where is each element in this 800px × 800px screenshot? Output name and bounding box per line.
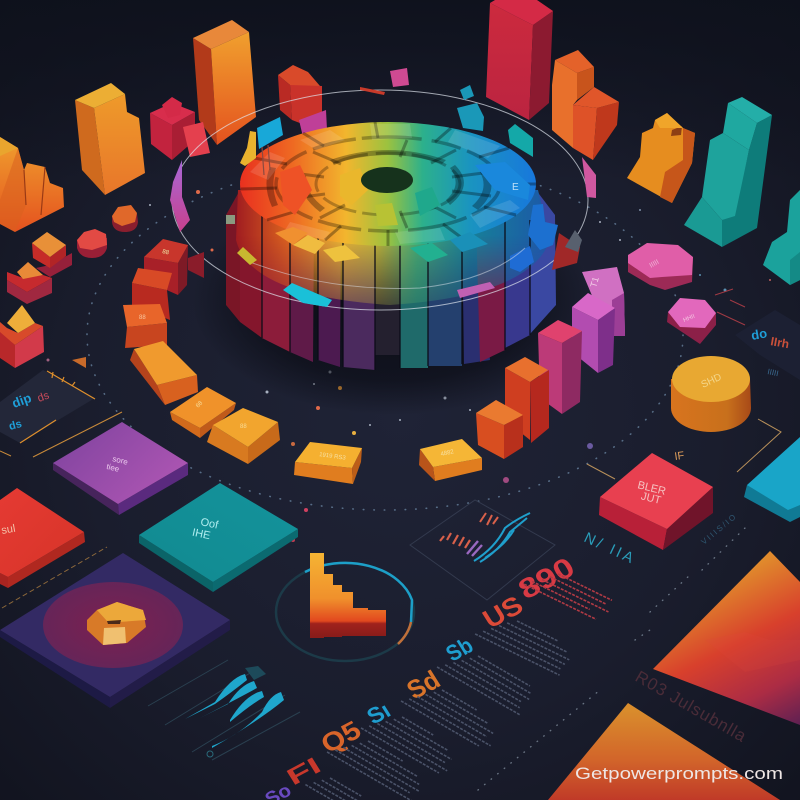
pink hexagon token: HHII [683, 314, 696, 324]
callout line right [587, 419, 781, 479]
yellow ring piece [294, 442, 362, 484]
cyan rotated label: N/ IIA [581, 529, 639, 568]
paragraph seven [305, 769, 378, 800]
right legend panel [735, 310, 800, 380]
magenta disc [43, 582, 183, 668]
ring top segments [241, 122, 536, 246]
small bar and wave chart panel [410, 500, 555, 600]
right legend panel: IIrh [769, 334, 790, 351]
small legend panel left [0, 370, 95, 443]
small red stacked cube [32, 232, 72, 277]
orange gradient panel [548, 703, 780, 800]
ring right blue stack [510, 204, 558, 272]
heading glyph four: Sd [401, 664, 445, 705]
tall orange block [193, 20, 256, 145]
amber ring piece [170, 387, 236, 438]
ring centre hole [361, 167, 413, 193]
ring front wall colours [236, 190, 550, 305]
dotted orbit around the central ring [87, 160, 683, 510]
orange triangle marker [72, 357, 86, 368]
orange cube [476, 400, 523, 459]
pink blob token: IIIII [648, 259, 660, 270]
accent line left [0, 412, 122, 457]
magenta small block [299, 110, 327, 137]
small legend panel left: ds [8, 418, 23, 433]
cyan flat block right [744, 437, 800, 522]
chart bars [310, 553, 386, 638]
watermark: Getpowerprompts.com [575, 764, 783, 783]
orbit line around ring [172, 90, 588, 310]
golden cylinder [671, 356, 751, 432]
amber ring piece two: 88 [240, 424, 247, 430]
navy flat card with disc [0, 553, 230, 708]
far left orange block group [0, 137, 64, 232]
small red stacked base [7, 262, 52, 304]
heading glyph two: US [477, 590, 528, 634]
paragraph two [475, 607, 575, 676]
amber ring piece two [207, 408, 280, 464]
ring top surface [240, 122, 536, 246]
red box ring piece [144, 239, 204, 295]
pink flat block [582, 267, 625, 336]
circular bar chart [276, 553, 414, 661]
red card text: sul [0, 523, 16, 537]
orange stepped block [552, 50, 619, 160]
paragraph five [361, 702, 459, 776]
paragraph one [524, 563, 614, 623]
dim label on right: VIIIS/IO [700, 511, 739, 547]
red block text: BLER [636, 479, 667, 498]
shadow beneath the central ring [192, 185, 592, 415]
small legend panel left: ds [36, 389, 51, 405]
paragraph three [437, 641, 535, 715]
tall amber block [75, 83, 145, 195]
yellow ring piece two [419, 439, 482, 481]
accent line mid [2, 547, 107, 608]
violet column [572, 293, 615, 373]
orbit chips [170, 68, 596, 307]
chart circle [276, 563, 414, 661]
tall crimson block [486, 0, 553, 120]
pink blob token [628, 243, 693, 290]
red flat card [0, 488, 85, 588]
teal block at right edge [763, 190, 800, 285]
yellow ring piece: 1919 RS3 [319, 452, 347, 462]
paragraph six [327, 726, 429, 800]
teal flat card [139, 483, 298, 592]
ring raised blocks: E [512, 182, 519, 193]
red box ring piece: 88 [162, 249, 170, 256]
red gradient panel [653, 551, 800, 725]
tall teal stepped block [684, 97, 772, 247]
small orange dome [112, 205, 138, 232]
red flat block right [599, 453, 713, 550]
paragraph four [401, 675, 503, 751]
yellow ring piece two: 4882 [440, 449, 455, 458]
long orange ring piece [130, 341, 198, 405]
purple card text: tiee [105, 462, 121, 474]
magenta column [538, 320, 582, 414]
scattered particles [46, 190, 771, 542]
golden cylinder: SHD [700, 372, 723, 391]
amber ring piece: 68 [195, 400, 205, 409]
teal card text: Oof [199, 516, 220, 532]
ring raised blocks [275, 162, 530, 262]
teal card text: IHE [191, 527, 211, 542]
amber stacked block [627, 113, 695, 203]
red stepped block [278, 65, 322, 125]
dim diagonal label: R03 Julsubnlla [632, 667, 750, 746]
pink hexagon token [667, 298, 716, 344]
purple flat card [53, 422, 188, 515]
pink flat block: T1 [588, 276, 601, 289]
heading glyph three: Sb [441, 632, 477, 666]
red-orange box ring piece [132, 268, 172, 320]
right legend panel: IIIII [767, 367, 779, 378]
pink callout lines [715, 289, 745, 325]
orange polygon gem [87, 602, 146, 645]
ring block highlights and shadows [250, 124, 520, 244]
tall red-orange column [505, 357, 549, 443]
central rainbow ring [226, 122, 558, 370]
heading glyph six: Q5 [315, 715, 366, 759]
heading glyph five: Sı [362, 697, 395, 729]
heading glyph seven: FI [282, 753, 326, 791]
heading glyph one: 890 [513, 552, 581, 606]
cyan flame chart [148, 660, 300, 760]
ring wall seams [262, 200, 530, 370]
ring base bars [226, 190, 556, 370]
legend glyphs: dip [10, 390, 33, 411]
right legend panel: do [750, 325, 768, 343]
purple card text: sore [112, 454, 129, 467]
orange box ring piece: 88 [139, 315, 146, 321]
small rotated orange label: IF [674, 450, 685, 463]
dotted divider lower right [478, 528, 745, 790]
orange box ring piece [123, 304, 167, 348]
coral round token [77, 229, 107, 258]
crimson cube cluster [150, 97, 210, 160]
orange and coral block at left edge [0, 305, 44, 368]
red block text: JUT [640, 490, 662, 507]
